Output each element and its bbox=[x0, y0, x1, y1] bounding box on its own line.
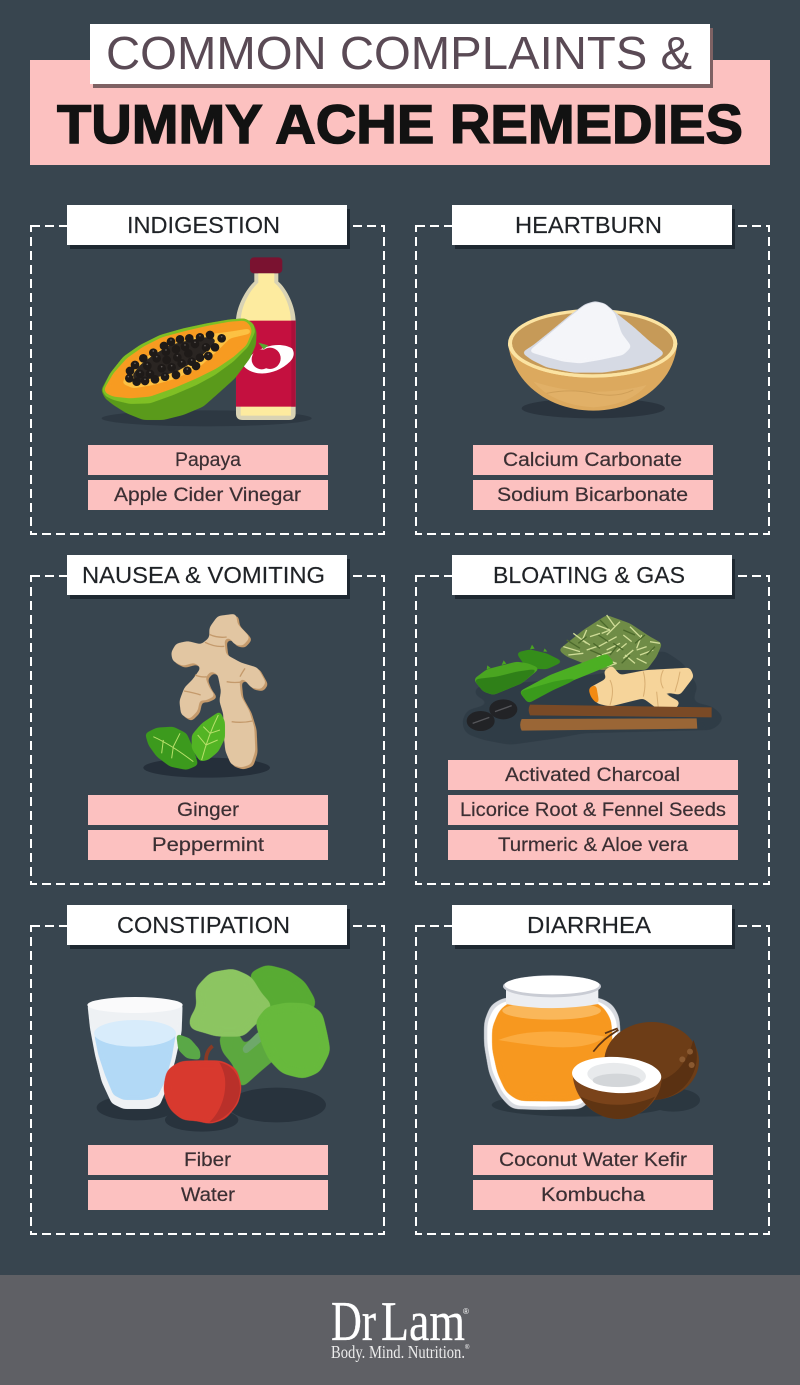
logo: Dr Lam: ® bbox=[463, 1307, 469, 1316]
remedy: kombucha bbox=[473, 1180, 713, 1210]
panel: bloating and gas bbox=[416, 555, 769, 884]
remedy: coconut water kefir: Coconut Water Kefir bbox=[499, 1150, 688, 1171]
logo: Dr Lam bbox=[331, 1291, 470, 1362]
remedy: coconut water kefir bbox=[473, 1145, 713, 1175]
remedy: apple cider vinegar bbox=[88, 480, 328, 510]
icon: jar of kefir and coconut bbox=[484, 975, 700, 1119]
remedy: water: Water bbox=[181, 1185, 236, 1206]
remedy: kombucha: Kombucha bbox=[541, 1185, 645, 1206]
remedy: turmeric and aloe vera bbox=[448, 830, 738, 860]
remedy: ginger bbox=[88, 795, 328, 825]
remedy: water bbox=[88, 1180, 328, 1210]
panel: heartburn bbox=[416, 205, 769, 534]
remedy: peppermint bbox=[88, 830, 328, 860]
footer band bbox=[0, 1275, 800, 1385]
remedy: ginger: Ginger bbox=[177, 800, 240, 821]
icon: glass of water, apple and broccoli bbox=[87, 964, 331, 1132]
heading: constipation: CONSTIPATION bbox=[117, 912, 290, 938]
remedy: licorice root and fennel seeds bbox=[448, 795, 738, 825]
logo: Dr Lam: ® bbox=[465, 1344, 470, 1351]
remedy: sodium bicarbonate bbox=[473, 480, 713, 510]
title line 1: COMMON COMPLAINTS & bbox=[106, 27, 692, 79]
logo: Dr Lam: Body. Mind. Nutrition. bbox=[331, 1342, 465, 1362]
remedy: peppermint: Peppermint bbox=[152, 835, 265, 856]
heading: indigestion: INDIGESTION bbox=[127, 212, 280, 238]
remedy: turmeric and aloe vera: Turmeric & Aloe vera bbox=[498, 835, 688, 856]
icon: ginger and peppermint bbox=[143, 614, 270, 778]
remedy: activated charcoal bbox=[448, 760, 738, 790]
logo: Dr Lam: Dr bbox=[331, 1291, 376, 1353]
remedy: fiber bbox=[88, 1145, 328, 1175]
heading: bloating and gas: BLOATING & GAS bbox=[493, 562, 685, 588]
remedy: calcium carbonate bbox=[473, 445, 713, 475]
remedy: papaya: Papaya bbox=[175, 450, 241, 471]
logo: Dr Lam: Lam bbox=[381, 1291, 465, 1353]
heading: diarrhea: DIARRHEA bbox=[527, 912, 652, 938]
panel: diarrhea bbox=[416, 905, 769, 1234]
remedy: papaya bbox=[88, 445, 328, 475]
icon: bowl of powder bbox=[508, 301, 677, 418]
icon: charcoal, aloe, fennel, ginger, licorice bbox=[462, 615, 725, 745]
remedy: apple cider vinegar: Apple Cider Vinegar bbox=[114, 485, 302, 506]
icon: papaya and apple cider vinegar bottle bbox=[101, 257, 312, 426]
title banner bbox=[30, 24, 770, 165]
remedy: activated charcoal: Activated Charcoal bbox=[505, 765, 680, 786]
heading: nausea and vomiting: NAUSEA & VOMITING bbox=[82, 562, 325, 588]
remedy: fiber: Fiber bbox=[184, 1150, 232, 1171]
heading: heartburn: HEARTBURN bbox=[515, 212, 662, 238]
panel: constipation bbox=[31, 905, 384, 1234]
remedy: licorice root and fennel seeds: Licorice Root & Fennel Seeds bbox=[460, 800, 726, 821]
remedy: sodium bicarbonate: Sodium Bicarbonate bbox=[497, 485, 688, 506]
remedy: calcium carbonate: Calcium Carbonate bbox=[503, 450, 682, 471]
panel: indigestion bbox=[31, 205, 384, 534]
panel: nausea and vomiting bbox=[31, 555, 384, 884]
title line 2: TUMMY ACHE REMEDIES bbox=[57, 93, 743, 155]
